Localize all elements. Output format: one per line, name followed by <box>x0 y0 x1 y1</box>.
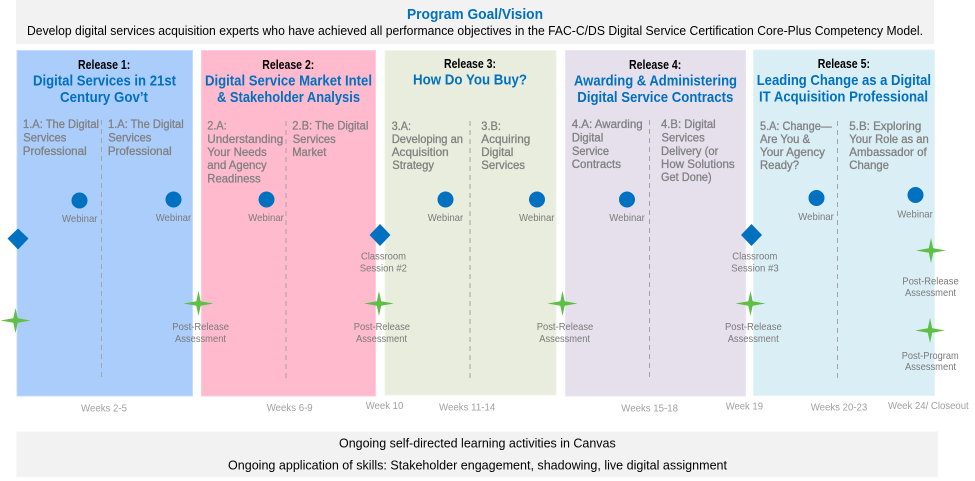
module 4.A: Service <box>572 144 609 158</box>
icon: classroom session #1 diamond <box>8 228 28 250</box>
milestone: post-release assessment 4: Assessment <box>728 333 779 345</box>
release 4 heading: Awarding & Administering <box>574 72 737 90</box>
module 3.A: Acquisition <box>392 145 449 159</box>
module 4.B: Get Done) <box>661 170 712 184</box>
icon: pre-program assessment star <box>1 308 31 333</box>
release 2 heading: Release 2: <box>262 57 314 72</box>
panel: release 2 <box>202 50 376 396</box>
timeline week labels: Weeks 11-14 <box>439 402 495 414</box>
milestone: classroom session #2 <box>360 224 407 275</box>
module 5.B <box>849 119 929 172</box>
panel: release 4 <box>566 50 746 396</box>
module 5.A: Your Agency <box>760 145 825 159</box>
panel: release 3 <box>385 50 556 395</box>
text: self-directed learning: Ongoing self-directed learning activities in Canvas <box>339 436 616 450</box>
milestone: post-release assessment 1: Post-Release <box>172 321 229 333</box>
module 1.A right: Professional <box>108 144 172 158</box>
module 5.A: Ready? <box>760 158 799 172</box>
release 2 heading: Digital Service Market Intel <box>205 72 372 90</box>
timeline week labels: Weeks 15-18 <box>621 403 678 415</box>
module 5.A <box>760 119 832 172</box>
release 1 heading: Digital Services in 21st <box>33 72 176 90</box>
module 1.A right <box>108 117 184 158</box>
webinar marker: Webinar <box>798 211 834 223</box>
webinar marker: Webinar <box>519 212 555 224</box>
milestone: post-release assessment 1 <box>172 291 229 345</box>
release 1 heading: Century Gov’t <box>60 89 148 106</box>
milestone: post-program assessment <box>902 318 959 373</box>
milestone: post-release assessment 2 <box>354 291 410 345</box>
milestone: post-release assessment 5: Assessment <box>905 287 956 299</box>
module 2.B: Market <box>292 145 327 159</box>
timeline week labels: Weeks 20-23 <box>811 402 867 414</box>
module 1.A left: Professional <box>23 144 87 158</box>
webinar marker <box>156 192 192 224</box>
module 3.B: Acquiring <box>481 132 530 146</box>
milestone: post-release assessment 3: Post-Release <box>537 321 593 333</box>
milestone: post-release assessment 2: Assessment <box>356 333 407 345</box>
module 2.B <box>292 119 368 159</box>
milestone: post-program assessment: Assessment <box>905 361 956 373</box>
module 3.B: 3.B: <box>481 119 501 133</box>
heading: program goal: Program Goal/Vision <box>407 6 543 23</box>
panel: release 1 <box>17 50 192 396</box>
module 4.B: Services <box>662 131 705 145</box>
release 3 heading: How Do You Buy? <box>413 72 527 88</box>
module 5.B: 5.B: Exploring <box>849 119 921 133</box>
webinar marker: Webinar <box>62 213 98 225</box>
module 5.A: Are You & <box>760 132 810 146</box>
release 2 heading <box>205 57 372 106</box>
module 3.B <box>481 119 530 172</box>
timeline week labels: Week 24/ Closeout <box>888 400 969 412</box>
release 1 heading <box>33 57 176 106</box>
module 3.A: 3.A: <box>392 119 411 133</box>
module 2.A: 2.A: <box>207 119 227 133</box>
timeline week labels: Week 10 <box>366 400 403 412</box>
module 5.A: 5.A: Change— <box>760 119 832 133</box>
webinar marker: Webinar <box>609 212 645 224</box>
module 3.A: Developing an <box>392 132 463 146</box>
module 4.A <box>572 117 643 171</box>
module 1.A left: Services <box>23 131 66 145</box>
release 5 heading: IT Acquisition Professional <box>759 88 928 106</box>
module 4.A: 4.A: Awarding <box>572 117 643 131</box>
timeline week labels: Weeks 2-5 <box>81 403 127 415</box>
milestone: post-release assessment 2: Post-Release <box>354 321 410 333</box>
module 3.B: Digital <box>481 145 513 159</box>
module 2.B: 2.B: The Digital <box>292 119 368 133</box>
timeline week labels <box>81 400 969 415</box>
release 2 heading: & Stakeholder Analysis <box>217 89 360 106</box>
webinar marker: Webinar <box>156 212 192 224</box>
release 3 heading: Release 3: <box>444 56 496 71</box>
module 4.B: 4.B: Digital <box>661 117 716 131</box>
text: vision statement: Develop digital services acquisition experts who have achieved all performance objectives in the FAC-C/DS Digital Service Certification Core-Plus Competency Model. <box>27 24 923 38</box>
release 4 heading: Digital Service Contracts <box>577 89 733 106</box>
module 3.A: Strategy <box>392 158 434 172</box>
module 2.A: Readiness <box>207 172 261 186</box>
release 5 heading <box>757 56 931 106</box>
release 4 heading: Release 4: <box>629 57 681 72</box>
module 4.A: Contracts <box>572 157 621 171</box>
panel: ongoing activities <box>16 432 938 477</box>
milestone: post-release assessment 5 <box>902 238 959 299</box>
module 4.B <box>661 117 735 184</box>
release 5 heading: Leading Change as a Digital <box>757 72 931 89</box>
module 2.A: and Agency <box>207 158 267 172</box>
webinar marker <box>519 192 555 224</box>
module 1.A right: 1.A: The Digital <box>108 117 184 131</box>
panel: program goal/vision <box>16 0 934 44</box>
webinar marker <box>428 192 464 224</box>
module 4.B: Delivery (or <box>661 144 718 158</box>
webinar marker: Webinar <box>248 212 284 224</box>
module 3.B: Services <box>481 158 525 172</box>
webinar marker <box>248 192 284 224</box>
timeline week labels: Week 19 <box>726 400 763 412</box>
webinar marker <box>62 192 98 225</box>
milestone: post-release assessment 4 <box>725 291 782 345</box>
module 2.B: Services <box>293 132 336 146</box>
milestone: post-release assessment 3 <box>537 291 593 345</box>
module 1.A right: Services <box>108 131 151 145</box>
webinar marker: Webinar <box>897 208 933 220</box>
release 3 heading <box>413 56 527 88</box>
module 5.B: Ambassador of <box>849 145 927 159</box>
webinar marker: Webinar <box>428 212 464 224</box>
webinar marker <box>798 190 834 223</box>
timeline week labels: Weeks 6-9 <box>267 402 313 414</box>
module 2.A <box>207 119 283 186</box>
module 1.A left: 1.A: The Digital <box>23 117 99 131</box>
module 5.B: Your Role as an <box>849 132 929 146</box>
milestone: classroom session #2: Classroom <box>361 250 406 262</box>
milestone: post-release assessment 3: Assessment <box>539 333 590 345</box>
webinar marker <box>609 192 645 224</box>
module 3.A <box>392 119 463 172</box>
milestone: classroom session #3: Classroom <box>732 250 778 262</box>
milestone: classroom session #3: Session #3 <box>731 263 779 275</box>
module 1.A left <box>23 117 99 158</box>
milestone: classroom session #2: Session #2 <box>360 263 407 275</box>
module 2.A: Understanding <box>207 132 283 146</box>
milestone: classroom session #3 <box>731 224 779 275</box>
milestone: post-release assessment 1: Assessment <box>175 333 226 345</box>
module 4.A: Digital <box>572 131 603 145</box>
release 4 heading <box>574 57 737 106</box>
panel: release 5 <box>754 50 934 396</box>
module 5.B: Change <box>849 158 889 172</box>
milestone: post-release assessment 4: Post-Release <box>725 321 782 333</box>
text: application of skills: Ongoing application of skills: Stakeholder engagement, shadowing, live digital assignment <box>228 458 728 472</box>
release 1 heading: Release 1: <box>78 57 130 72</box>
module 2.A: Your Needs <box>207 145 267 159</box>
module 4.B: How Solutions <box>661 157 735 171</box>
release 5 heading: Release 5: <box>818 56 870 71</box>
milestone: post-release assessment 5: Post-Release <box>902 276 959 288</box>
webinar marker <box>897 187 933 220</box>
milestone: post-program assessment: Post-Program <box>902 350 959 362</box>
